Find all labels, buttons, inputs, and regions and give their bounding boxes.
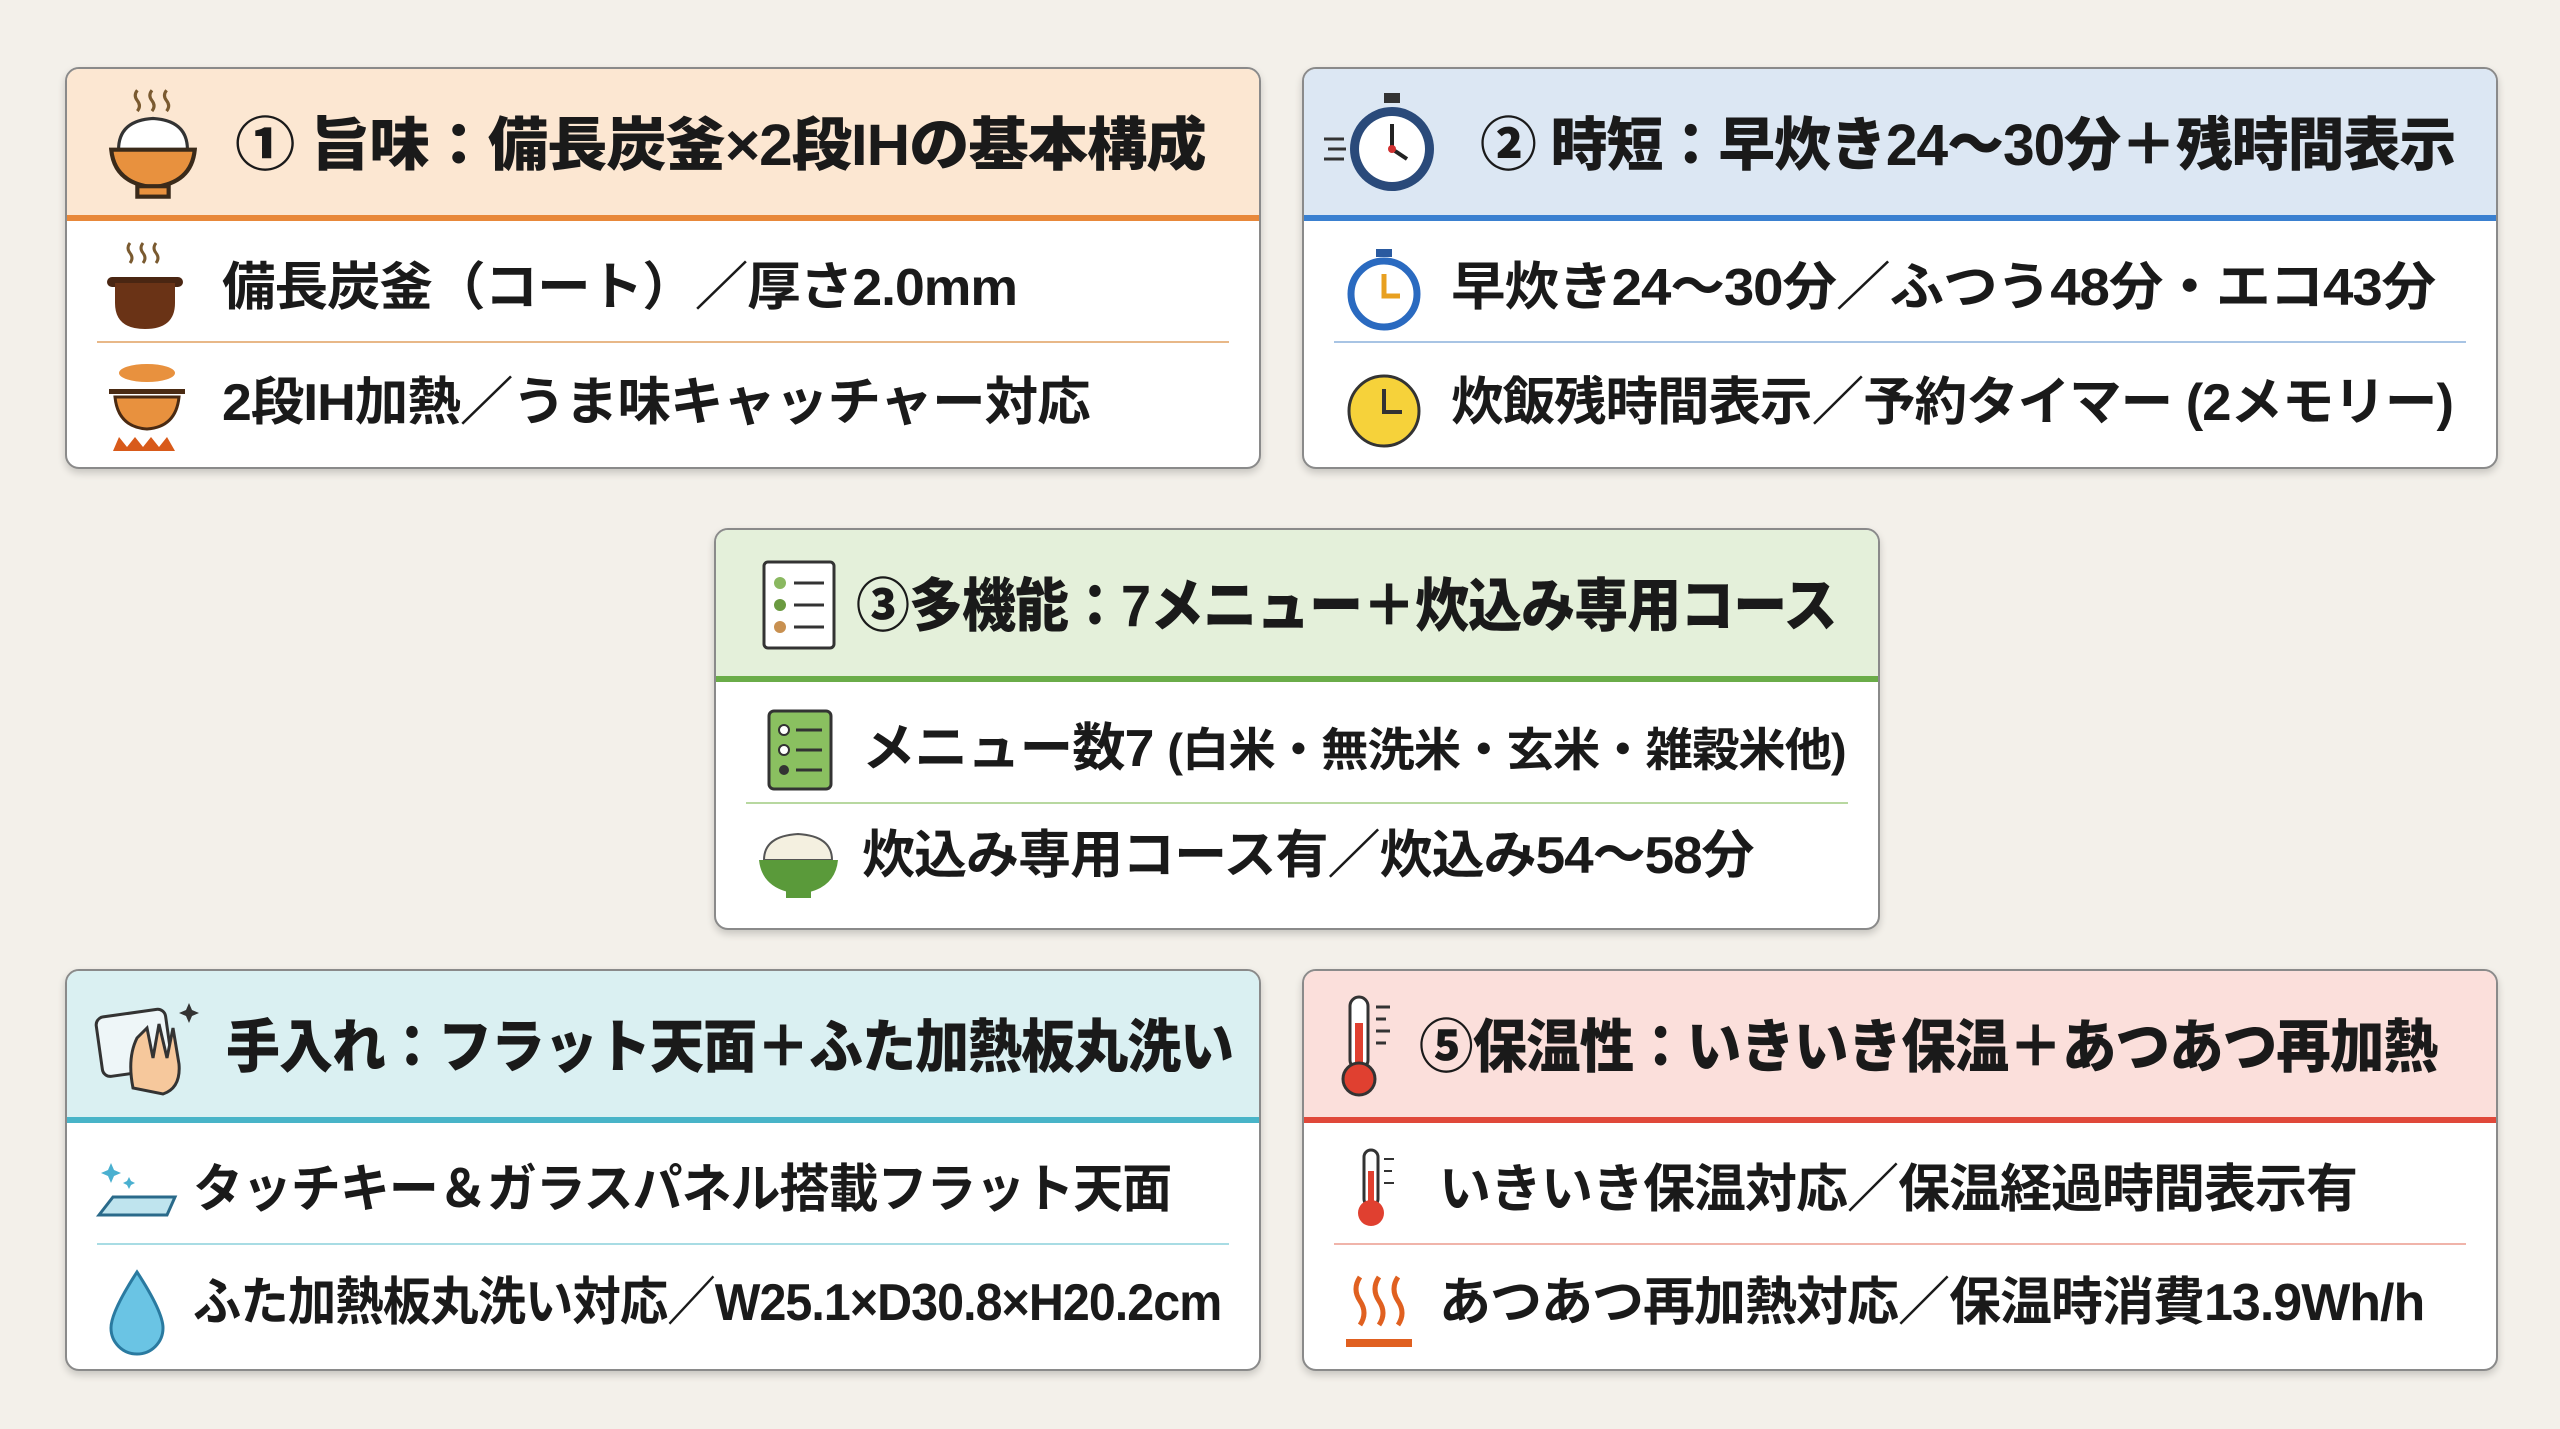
heading: ② 時短：早炊き24〜30分＋残時間表示 (1480, 113, 2455, 178)
heading: ③多機能：7メニュー＋炊込み専用コース (856, 574, 1837, 639)
heading: ⑤保温性：いきいき保温＋あつあつ再加熱 (1419, 1015, 2437, 1080)
icon: water drop (110, 1269, 164, 1356)
panel: keep warm (1302, 969, 2498, 1371)
icon: stopwatch (1324, 93, 1434, 191)
icon: mixed rice bowl (759, 833, 838, 898)
header: umami (67, 69, 1259, 221)
icon: pot (107, 242, 183, 329)
icon: IH heating (109, 364, 185, 451)
row: IH: 2段IH加熱／うま味キャッチャー対応 (222, 374, 1090, 432)
header: warm (1304, 971, 2496, 1123)
icon: green list (768, 710, 832, 790)
row: keep warm: いきいき保温対応／保温経過時間表示有 (1439, 1161, 2357, 1219)
row: takikomi: 炊込み専用コース有／炊込み54〜58分 (862, 827, 1754, 885)
row: touch panel: タッチキー＆ガラスパネル搭載フラット天面 (193, 1161, 1171, 1219)
heading: 手入れ：フラット天面＋ふた加熱板丸洗い (226, 1015, 1233, 1080)
row: quick cook: 早炊き24〜30分／ふつう48分・エコ43分 (1451, 259, 2435, 317)
panel: time saving (1302, 67, 2498, 469)
row: reheat: あつあつ再加熱対応／保温時消費13.9Wh/h (1439, 1274, 2424, 1332)
icon: thermometer (1342, 996, 1390, 1096)
row: remaining time: 炊飯残時間表示／予約タイマー (2メモリー) (1451, 374, 2453, 432)
header: time (1304, 69, 2496, 221)
icon: wiping hand (94, 1003, 199, 1096)
icon: flat panel (96, 1163, 178, 1216)
row: menu count: メニュー数7 (白米・無洗米・玄米・雑穀米他) (862, 720, 1846, 778)
icon: menu list (762, 560, 836, 650)
icon: rice bowl (109, 89, 197, 199)
row: washable: ふた加熱板丸洗い対応／W25.1×D30.8×H20.2cm (193, 1274, 1221, 1332)
panel: maintenance (65, 969, 1261, 1371)
panel: umami (65, 67, 1261, 469)
icon: clock (1348, 374, 1420, 448)
row: kama: 備長炭釜（コート）／厚さ2.0mm (222, 259, 1017, 317)
icon: heat waves (1346, 1276, 1412, 1347)
icon: timer (1348, 249, 1420, 330)
heading: ① 旨味：備長炭釜×2段IHの基本構成 (235, 113, 1206, 178)
panel: multi-function (714, 528, 1880, 930)
header: multi (716, 530, 1878, 682)
icon: small thermometer (1358, 1148, 1394, 1226)
header: care (67, 971, 1259, 1123)
